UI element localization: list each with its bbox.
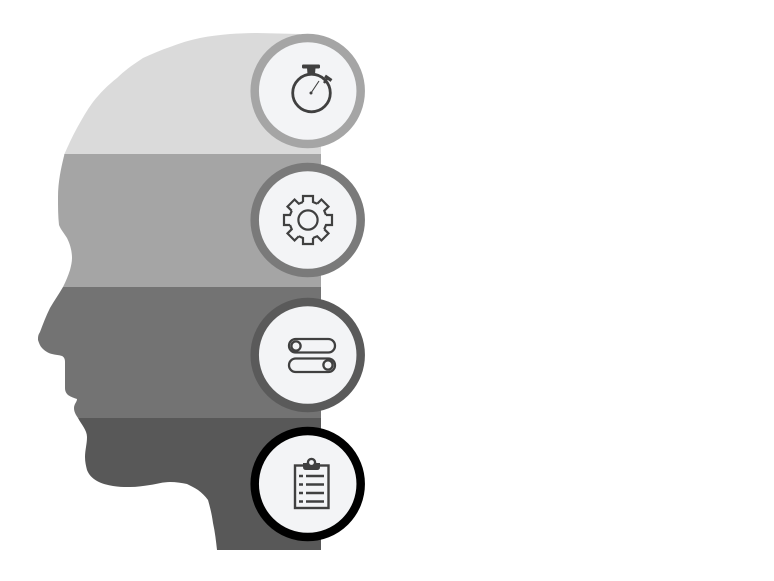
icon: clipboard checklist	[295, 459, 328, 508]
icon: toggle switches	[289, 339, 335, 372]
circle 1: stopwatch	[255, 38, 361, 144]
head band 2: forehead	[58, 154, 321, 287]
head band 4: chin and neck	[78, 418, 321, 550]
head band 1: crown	[64, 33, 321, 155]
circle 2: gear	[255, 167, 361, 273]
icon: stopwatch	[293, 64, 332, 112]
head band 3: nose	[38, 287, 321, 418]
icon: gear	[284, 196, 332, 244]
circle 3: toggles	[255, 302, 361, 408]
circle 4: clipboard	[255, 431, 361, 537]
